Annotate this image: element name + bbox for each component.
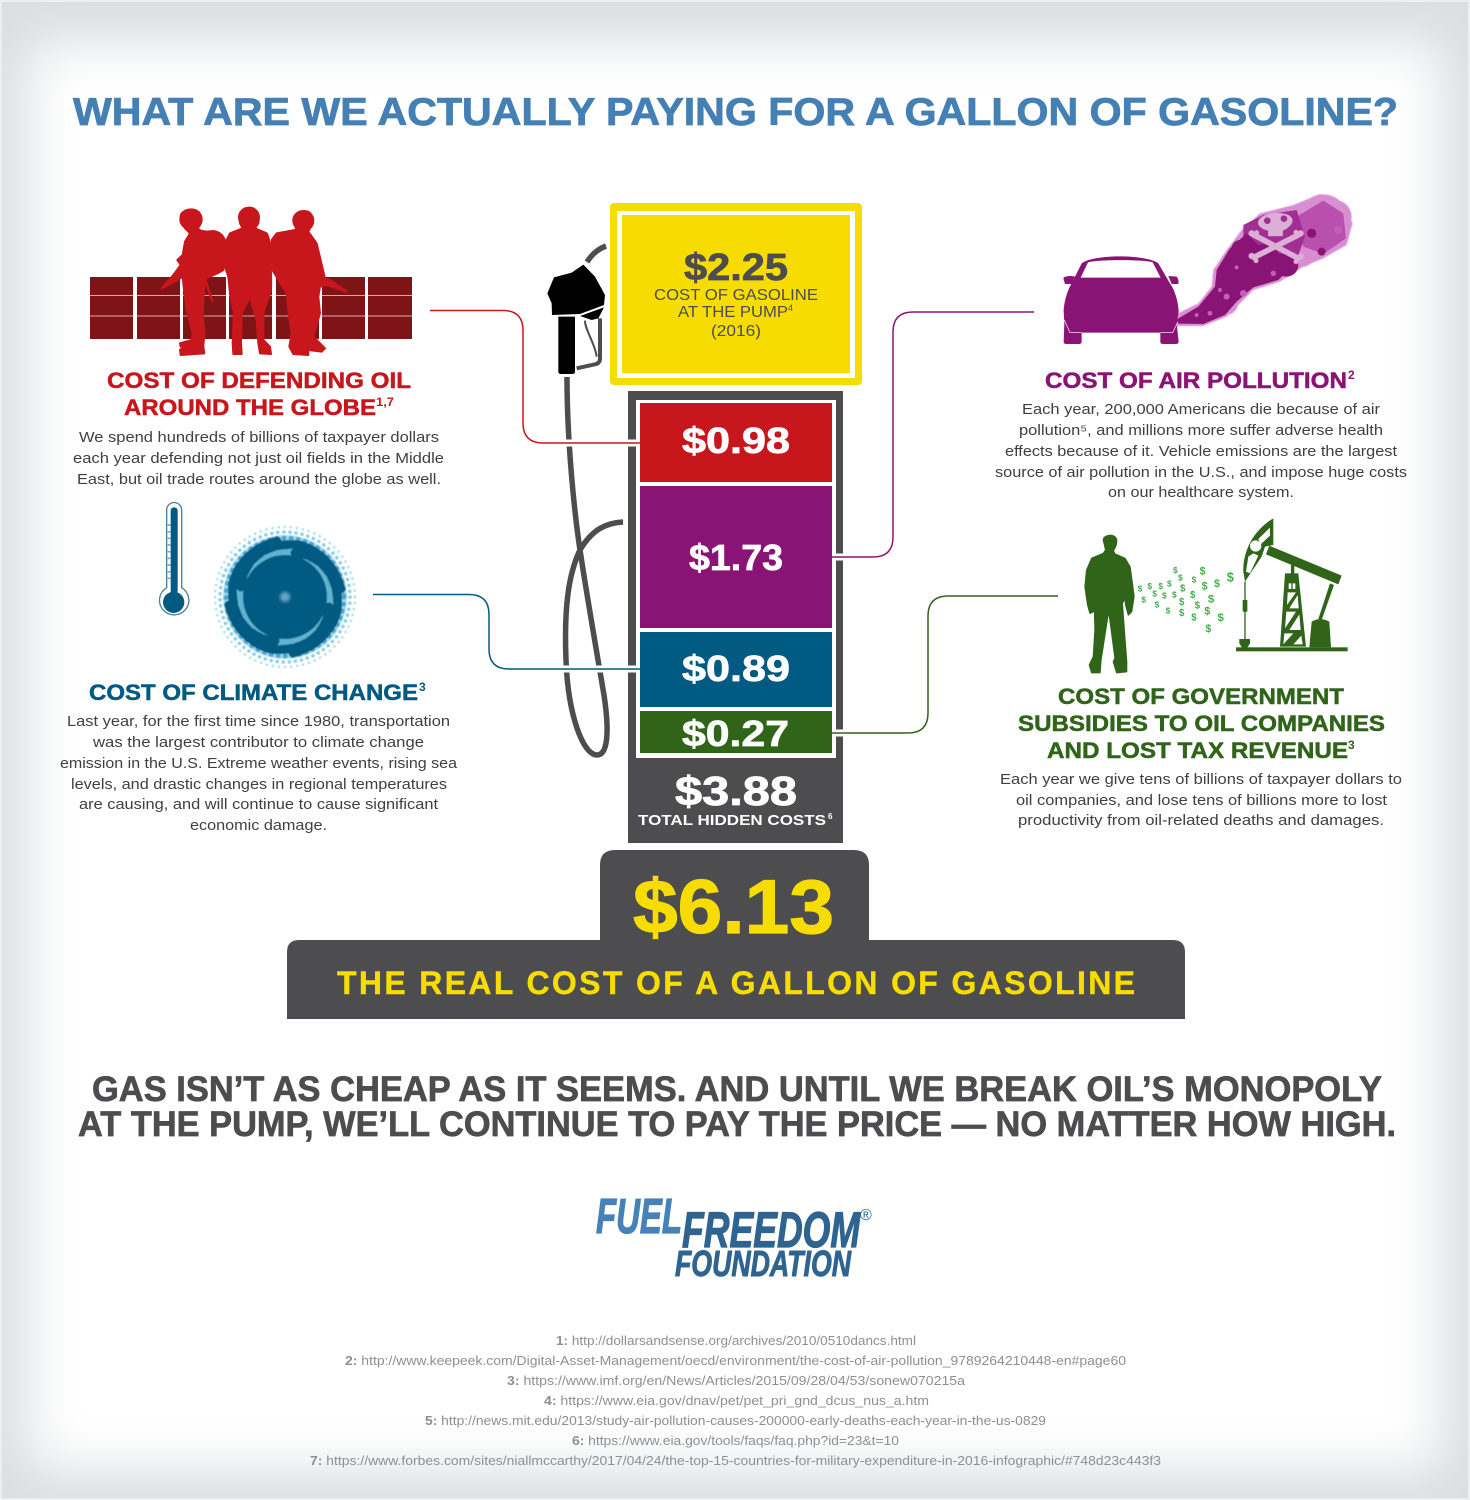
- panel: cost of air pollution: [995, 194, 1407, 501]
- heading: defending oil: 1,7: [376, 395, 394, 409]
- icon: dollars: $: [1214, 578, 1220, 590]
- text: climate change description: levels, and drastic changes in regional temperatures: [71, 776, 447, 793]
- smoke cloud: [1158, 194, 1353, 326]
- icon: dollars: $: [1152, 588, 1157, 598]
- text: government subsidies description: productivity from oil-related deaths and damages.: [1018, 812, 1384, 829]
- icon: dollars: $: [1147, 581, 1152, 591]
- icon: dollars: $: [1204, 606, 1210, 618]
- text: climate change description: are causing, and will continue to cause significant: [79, 796, 439, 813]
- icon: dollars: $: [1200, 566, 1206, 578]
- text: government subsidies description: [1000, 771, 1402, 829]
- text: defending oil description: We spend hundreds of billions of taxpayer dollars: [79, 429, 439, 446]
- heading: government subsidies: 3: [1348, 738, 1355, 752]
- bar: air pollution: $1.73: [689, 537, 783, 578]
- icon: dollars: $: [1179, 608, 1185, 619]
- heading: air pollution: COST OF AIR POLLUTION: [1045, 368, 1347, 393]
- icon: dollars: $: [1173, 565, 1178, 575]
- logo: Fuel Freedom Foundation: FOUNDATION: [675, 1243, 852, 1284]
- heading: air pollution: 2: [1348, 368, 1355, 382]
- text: air pollution description: source of air pollution in the U.S., and impose huge costs: [995, 464, 1407, 481]
- icon: man: [1085, 535, 1134, 673]
- heading: defending oil: COST OF DEFENDING OIL: [107, 368, 411, 393]
- total hidden costs: TOTAL HIDDEN COSTS: [638, 812, 826, 829]
- bar: subsidies: [640, 711, 832, 754]
- pump display: cost at the pump: [610, 203, 862, 385]
- closing statement: [78, 1070, 1396, 1144]
- icon: dollars: $: [1141, 594, 1146, 604]
- text: climate change description: was the largest contributor to climate change: [92, 734, 424, 751]
- label: cost at the pump: COST OF GASOLINE: [654, 287, 818, 304]
- value: pump price: $2.25: [684, 247, 788, 289]
- icon: thermometer: [159, 502, 189, 615]
- real cost base: [287, 850, 1185, 1019]
- text: climate change description: economic damage.: [190, 817, 327, 834]
- logo: Fuel Freedom Foundation: FUEL: [596, 1190, 682, 1244]
- heading: government subsidies: SUBSIDIES TO OIL COMPANIES: [1018, 711, 1385, 736]
- text: air pollution description: Each year, 200,000 Americans die because of air: [1022, 401, 1380, 418]
- text: air pollution description: effects because of it. Vehicle emissions are the largest: [1005, 443, 1398, 460]
- text: defending oil description: [73, 429, 444, 488]
- icon: dollars: $: [1179, 597, 1185, 608]
- heading: climate change: COST OF CLIMATE CHANGE: [89, 680, 418, 705]
- icon: dollars: $: [1217, 612, 1224, 624]
- closing statement: GAS ISN’T AS CHEAP AS IT SEEMS. AND UNTIL WE BREAK OIL’S MONOPOLY: [92, 1070, 1382, 1109]
- footnotes: 3: https://www.imf.org/en/News/Articles/2015/09/28/04/53/sonew070215a: [507, 1374, 965, 1388]
- icon: dollars: $: [1202, 580, 1208, 592]
- closing statement: AT THE PUMP, WE’LL CONTINUE TO PAY THE PRICE — NO MATTER HOW HIGH.: [78, 1105, 1396, 1144]
- icon: dollars: $: [1192, 575, 1197, 585]
- icon: dollars: $: [1195, 601, 1201, 612]
- icon: hurricane: [215, 527, 355, 667]
- icon: dollars: $: [1155, 599, 1160, 609]
- text: air pollution description: on our healthcare system.: [1108, 484, 1294, 501]
- footnotes: 2: http://www.keepeek.com/Digital-Asset-Management/oecd/environment/the-cost-of-air-pollution_9789264210448-en#page60: [345, 1354, 1126, 1368]
- footnotes: [310, 1334, 1161, 1468]
- logo: Fuel Freedom Foundation: ®: [860, 1207, 872, 1224]
- label: cost at the pump: [654, 287, 818, 340]
- skull and crossbones: [1249, 213, 1304, 264]
- text: climate change description: [60, 713, 458, 834]
- bar: climate change: $0.89: [682, 648, 790, 689]
- heading: climate change: 3: [419, 680, 426, 694]
- footnotes: 4: https://www.eia.gov/dnav/pet/pet_pri_gnd_dcus_nus_a.htm: [544, 1394, 929, 1408]
- label: real cost: THE REAL COST OF A GALLON OF GASOLINE: [337, 965, 1135, 1001]
- title: WHAT ARE WE ACTUALLY PAYING FOR A GALLON OF GASOLINE?: [73, 91, 1398, 134]
- icon: fuel hose: [566, 246, 623, 755]
- icon: dollars: $: [1180, 583, 1186, 594]
- heading: defending oil: AROUND THE GLOBE: [124, 395, 376, 420]
- heading: defending oil: [107, 368, 411, 420]
- icon: dollars: $: [1166, 605, 1171, 615]
- label: cost at the pump: (2016): [711, 323, 761, 340]
- icon: oil pump jack: [1236, 518, 1348, 651]
- icon: dollars: $: [1162, 591, 1167, 601]
- total hidden costs: $3.88: [675, 768, 797, 814]
- logo: Fuel Freedom Foundation: [596, 1190, 872, 1284]
- text: government subsidies description: Each year we give tens of billions of taxpayer dollars to: [1000, 771, 1402, 788]
- label: cost at the pump: AT THE PUMP: [678, 304, 788, 321]
- logo: Fuel Freedom Foundation: FREEDOM: [682, 1202, 861, 1258]
- connector: subsidies: [832, 596, 1058, 733]
- connector: air pollution: [832, 312, 1034, 557]
- text: defending oil description: each year defending not just oil fields in the Middle: [73, 450, 444, 467]
- pump column: hidden costs: [628, 391, 843, 843]
- panel: cost of defending oil: [73, 208, 444, 488]
- bar: air pollution: [640, 486, 832, 628]
- icon: dollars: $: [1158, 581, 1163, 591]
- total hidden costs: [638, 768, 833, 829]
- icon: dollars: $: [1227, 570, 1234, 584]
- icon: dollars: [1138, 565, 1234, 635]
- icon: dollars: $: [1191, 613, 1197, 624]
- heading: government subsidies: [1018, 684, 1385, 763]
- label: cost at the pump: 4: [788, 303, 793, 313]
- icon: dollars: $: [1167, 578, 1172, 588]
- value: real cost: $6.13: [633, 865, 834, 950]
- icon: dollars: $: [1138, 583, 1143, 593]
- text: defending oil description: East, but oil trade routes around the globe as well.: [77, 471, 441, 488]
- footnotes: 5: http://news.mit.edu/2013/study-air-pollution-causes-200000-early-deaths-each-year-in-the-us-0829: [425, 1414, 1046, 1428]
- connector: climate change: [373, 594, 640, 669]
- icon: dollars: $: [1172, 589, 1177, 599]
- text: air pollution description: pollution⁵, and millions more suffer adverse health: [1019, 422, 1383, 439]
- total hidden costs: 6: [828, 812, 833, 821]
- icon: oil barrels and soldiers: [90, 208, 412, 355]
- icon: dollars: $: [1208, 594, 1215, 606]
- text: climate change description: emission in the U.S. Extreme weather events, rising sea: [60, 755, 458, 772]
- bar: subsidies: $0.27: [682, 713, 789, 754]
- icon: dollars: $: [1205, 623, 1211, 635]
- car: [1064, 256, 1179, 344]
- footnotes: 7: https://www.forbes.com/sites/niallmccarthy/2017/04/24/the-top-15-countries-for-military-expenditure-in-2016-infographic/#748d23c443f3: [310, 1454, 1161, 1468]
- connector: defending oil: [430, 310, 640, 443]
- text: government subsidies description: oil companies, and lose tens of billions more to lost: [1016, 792, 1388, 809]
- text: air pollution description: [995, 401, 1407, 501]
- icon: car with toxic smoke: [1063, 194, 1353, 344]
- bar: defending oil: $0.98: [682, 420, 790, 461]
- icon: dollars: $: [1178, 573, 1183, 583]
- panel: cost of government subsidies: [1000, 518, 1402, 829]
- footnotes: 6: https://www.eia.gov/tools/faqs/faq.php?id=23&t=10: [572, 1434, 899, 1448]
- icon: dollars: $: [1190, 590, 1196, 601]
- heading: government subsidies: AND LOST TAX REVENUE: [1047, 738, 1348, 763]
- heading: government subsidies: COST OF GOVERNMENT: [1058, 684, 1345, 709]
- bar: defending oil: [640, 403, 832, 482]
- footnotes: 1: http://dollarsandsense.org/archives/2010/0510dancs.html: [556, 1334, 916, 1348]
- bar: climate change: [640, 632, 832, 707]
- icon: fuel nozzle: [547, 265, 605, 374]
- text: climate change description: Last year, for the first time since 1980, transportation: [67, 713, 450, 730]
- panel: cost of climate change: [60, 502, 458, 834]
